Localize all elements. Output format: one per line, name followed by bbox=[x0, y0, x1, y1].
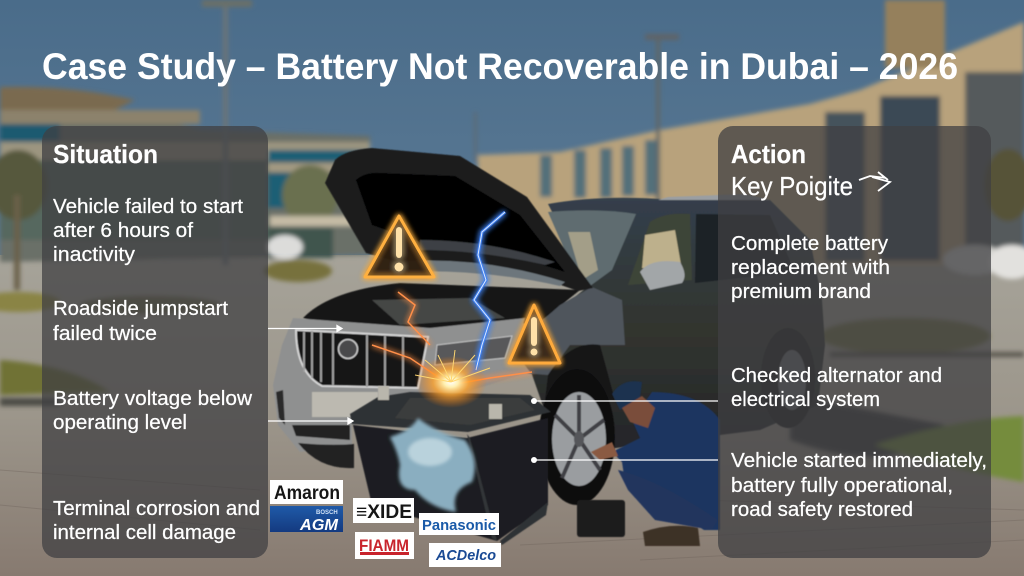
heading: situation: Situation bbox=[53, 139, 158, 169]
logo: AGM: BOSCH bbox=[316, 510, 338, 516]
text: corrosion and cell damage: internal cell damage bbox=[53, 522, 236, 544]
heading: action: Action bbox=[731, 139, 806, 169]
logo: AGM bbox=[270, 506, 343, 534]
title: Case Study – Battery Not Recoverable in Dubai – 2026 bbox=[42, 46, 958, 87]
text: outcome: battery fully operational, bbox=[731, 475, 953, 497]
heading: key points: Key Poigite bbox=[731, 171, 853, 201]
text: battery replacement: replacement with bbox=[731, 257, 890, 279]
front tyre bbox=[298, 443, 354, 468]
icon: small warning triangle bbox=[509, 305, 560, 363]
palms, cars, shrubs bbox=[0, 150, 48, 220]
text: no start after inactivity: Vehicle failed to start bbox=[53, 196, 243, 218]
logo: FIAMM: FIAMM bbox=[359, 536, 409, 555]
logo: ACDelco: ACDelco bbox=[435, 547, 496, 564]
icon: large warning triangle bbox=[365, 216, 434, 277]
front wheel bbox=[539, 369, 615, 505]
paver lines bbox=[0, 470, 1024, 560]
arrow: jumpstart to grille bbox=[268, 326, 342, 332]
mirror bbox=[640, 261, 685, 290]
terminals bbox=[378, 386, 389, 400]
side window bbox=[628, 214, 692, 285]
text: battery replacement: premium brand bbox=[731, 281, 871, 303]
text: outcome: Vehicle started immediately, bbox=[731, 450, 987, 472]
text: low battery voltage: operating level bbox=[53, 412, 187, 434]
illustration: SUV with open hood bbox=[273, 148, 825, 505]
plate bbox=[312, 392, 378, 417]
logo: Amaron: Amaron bbox=[274, 483, 340, 504]
logo: ACDelco bbox=[429, 543, 501, 567]
text: jumpstart failed: failed twice bbox=[53, 323, 157, 345]
battery base bbox=[500, 502, 548, 545]
arrow: voltage to battery bbox=[268, 418, 353, 424]
logo: AGM: AGM bbox=[299, 517, 339, 534]
logo: FIAMM bbox=[355, 532, 414, 559]
logo: Panasonic: Panasonic bbox=[422, 517, 496, 534]
text: corrosion and cell damage: Terminal corrosion and bbox=[53, 498, 260, 520]
lamp posts bbox=[223, 0, 228, 265]
text: jumpstart failed: Roadside jumpstart bbox=[53, 298, 228, 320]
right building bbox=[478, 22, 1024, 265]
roof rail bbox=[658, 194, 770, 200]
text: alternator check: Checked alternator and bbox=[731, 365, 942, 387]
logo: Exide: ≡XIDE bbox=[356, 502, 412, 523]
illustration: mechanic crouching bbox=[577, 381, 720, 546]
text: low battery voltage: Battery voltage below bbox=[53, 388, 253, 410]
emblem bbox=[338, 340, 358, 358]
text: outcome: road safety restored bbox=[731, 499, 913, 521]
text: alternator check: electrical system bbox=[731, 389, 880, 411]
hood bbox=[325, 148, 593, 291]
icon: scribbled arrow bbox=[859, 172, 890, 191]
car body side bbox=[520, 198, 825, 455]
rear wheel bbox=[761, 328, 815, 428]
panel: situation bbox=[42, 126, 268, 558]
grille bbox=[296, 330, 428, 388]
illustration: damaged battery bbox=[350, 386, 551, 545]
leaking acid bbox=[390, 418, 475, 512]
front fascia bbox=[273, 318, 530, 452]
fender bbox=[510, 287, 625, 375]
engine bay bbox=[303, 283, 580, 332]
text: no start after inactivity: inactivity bbox=[53, 244, 135, 266]
windshield bbox=[548, 210, 636, 286]
text: no start after inactivity: after 6 hours of bbox=[53, 220, 193, 242]
text: battery replacement: Complete battery bbox=[731, 233, 888, 255]
leader: result to battery body bbox=[531, 457, 718, 463]
panel: action bbox=[718, 126, 991, 558]
leader: alternator to battery terminal bbox=[531, 398, 718, 404]
left building bbox=[0, 110, 370, 262]
icon: electrical sparks and lightning bbox=[372, 212, 532, 408]
headlight bbox=[435, 336, 512, 365]
